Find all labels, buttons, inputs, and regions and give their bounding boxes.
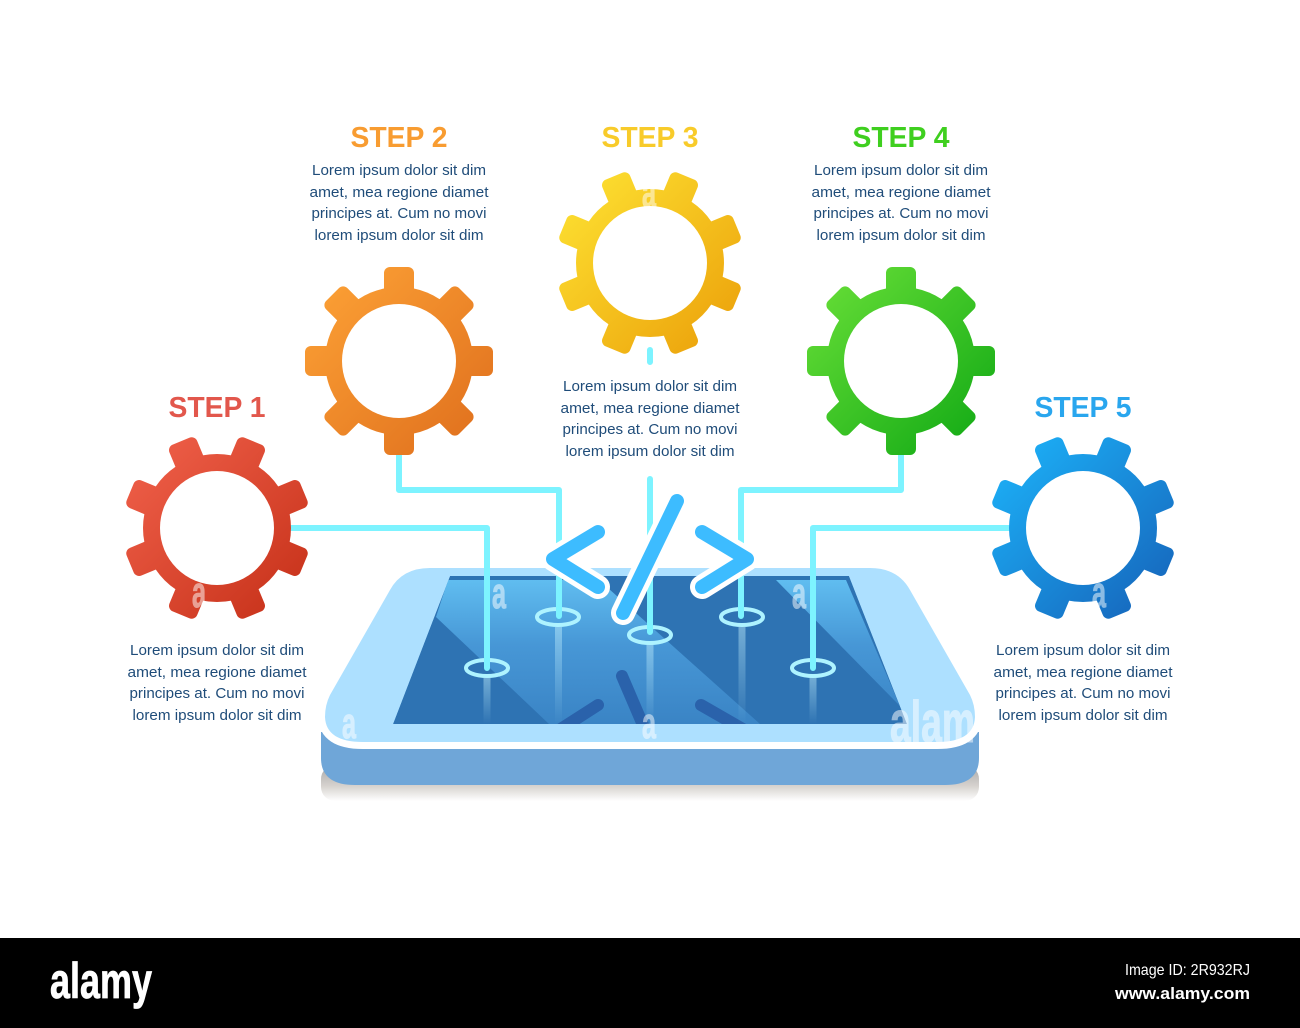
text block: step 1: principes at. Cum no movi	[130, 685, 304, 702]
footer bar	[0, 938, 1300, 1028]
connector: step 2	[399, 450, 559, 616]
watermarks: alam	[890, 690, 975, 755]
text block: step 1: amet, mea regione diamet	[128, 664, 307, 681]
connector end rings	[466, 609, 834, 676]
text block: step 5: Lorem ipsum dolor sit dim	[996, 642, 1170, 659]
text block: step 4: Lorem ipsum dolor sit dim	[814, 162, 988, 179]
text block: step 2: principes at. Cum no movi	[312, 205, 486, 222]
connector: step 3	[647, 350, 653, 632]
text block: step 5	[994, 642, 1173, 724]
watermarks: a	[642, 168, 656, 217]
text block: step 2	[310, 162, 489, 244]
icon: green gear	[807, 267, 995, 455]
code symbol	[553, 501, 747, 613]
footer image id: Image ID: 2R932RJ	[1125, 962, 1250, 979]
connector: step 5	[813, 528, 1012, 668]
text block: step 4: lorem ipsum dolor sit dim	[816, 227, 986, 244]
watermarks: a	[792, 569, 806, 618]
panel: step 4	[801, 122, 1001, 461]
connector: step 1	[290, 528, 487, 668]
text block: step 3: lorem ipsum dolor sit dim	[566, 443, 734, 460]
slash	[623, 501, 677, 613]
panel: step 3	[559, 126, 741, 459]
watermarks	[192, 168, 1106, 755]
text block: step 4: amet, mea regione diamet	[812, 184, 991, 201]
text block: step 5: principes at. Cum no movi	[996, 685, 1170, 702]
text block: step 1	[128, 642, 307, 724]
heading: step 5: STEP 5	[1034, 392, 1132, 424]
icon: yellow gear	[559, 172, 741, 354]
phone ground shadow	[321, 765, 979, 801]
connector: step 4	[741, 450, 901, 616]
text block: step 3: amet, mea regione diamet	[560, 400, 740, 417]
heading: step 3: STEP 3	[602, 122, 698, 154]
text block: step 1: Lorem ipsum dolor sit dim	[130, 642, 304, 659]
text block: step 2: Lorem ipsum dolor sit dim	[312, 162, 486, 179]
text block: step 1: lorem ipsum dolor sit dim	[132, 707, 302, 724]
text block: step 3	[560, 378, 740, 460]
connector lines	[290, 350, 1012, 668]
watermarks: a	[1092, 568, 1106, 617]
panel: step 2	[299, 122, 499, 461]
panel: step 1	[126, 396, 308, 723]
text block: step 4	[812, 162, 991, 244]
phone screen	[393, 576, 907, 732]
text block: step 3: principes at. Cum no movi	[562, 421, 738, 438]
panel: step 5	[992, 396, 1174, 723]
heading: step 2: STEP 2	[350, 122, 448, 154]
icon: blue gear	[992, 437, 1174, 619]
text block: step 2: amet, mea regione diamet	[310, 184, 489, 201]
watermarks: a	[492, 569, 506, 618]
right chevron	[702, 532, 747, 587]
icon: orange gear	[305, 267, 493, 455]
text block: step 4: principes at. Cum no movi	[814, 205, 988, 222]
watermarks: a	[192, 568, 206, 617]
text block: step 2: lorem ipsum dolor sit dim	[314, 227, 484, 244]
phone front face	[325, 568, 975, 742]
phone side edge	[321, 732, 979, 785]
heading: step 4: STEP 4	[852, 122, 950, 154]
heading: step 1: STEP 1	[168, 392, 266, 424]
text block: step 5: amet, mea regione diamet	[994, 664, 1173, 681]
footer logo: alamy	[50, 953, 152, 1009]
watermarks: a	[342, 699, 356, 748]
icon: red gear	[126, 437, 308, 619]
left chevron	[553, 532, 598, 587]
text block: step 5: lorem ipsum dolor sit dim	[998, 707, 1168, 724]
footer url: www.alamy.com	[1114, 984, 1250, 1003]
text block: step 3: Lorem ipsum dolor sit dim	[563, 378, 737, 395]
watermarks: a	[642, 699, 656, 748]
smartphone	[321, 568, 979, 801]
